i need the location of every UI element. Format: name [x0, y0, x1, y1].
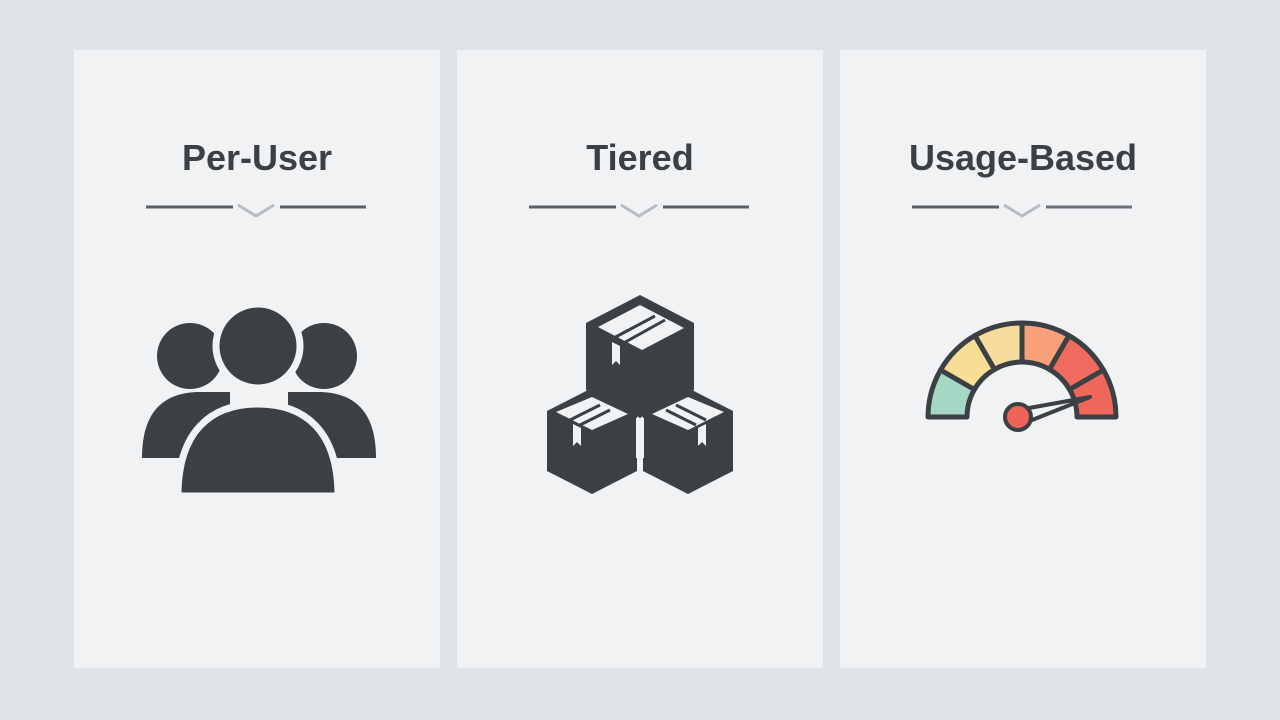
divider: [146, 204, 366, 218]
icon: gauge: [926, 320, 1118, 432]
icon: users: [142, 308, 376, 492]
divider: [529, 204, 749, 218]
divider: [912, 204, 1132, 218]
icon: boxes: [547, 295, 733, 494]
panel: per-user: [74, 50, 440, 668]
heading: Per-User: Per-User: [182, 137, 332, 178]
heading: Tiered: Tiered: [586, 137, 694, 178]
heading: Usage-Based: Usage-Based: [909, 137, 1137, 178]
panel: usage-based: [840, 50, 1206, 668]
panel: tiered: [457, 50, 823, 668]
